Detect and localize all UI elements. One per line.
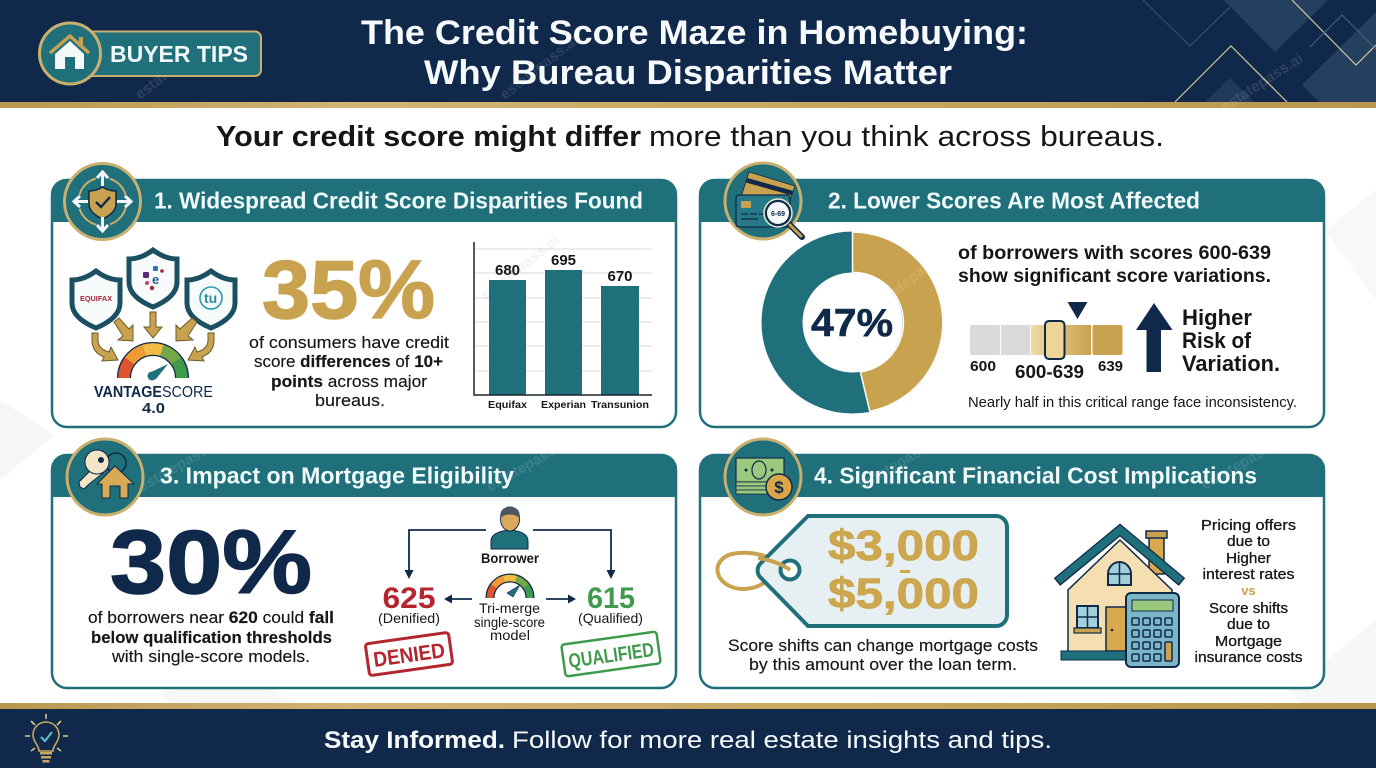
icon: money and coin	[725, 439, 801, 515]
price tag: $3,000 - $5,000: $3,000	[828, 522, 979, 570]
heading: panel 2: 2. Lower Scores Are Most Affected	[828, 188, 1200, 214]
flow diagram: borrower outcomes	[365, 507, 661, 677]
text: higher risk of variation	[1182, 305, 1280, 376]
text: pricing vs score shifts: Mortgage	[1215, 634, 1282, 650]
text: pricing vs score shifts: due to	[1227, 534, 1270, 550]
stamp: qualified	[561, 631, 661, 677]
panel 2: lower scores	[699, 163, 1325, 427]
heading: panel 1: 1. Widespread Credit Score Disparities Found	[154, 188, 643, 214]
panel 4: financial cost: estatepass.ai	[1198, 432, 1289, 493]
arrows into gauge	[92, 312, 214, 361]
icon: house with calculator	[1057, 530, 1182, 667]
label: vantagescore 4.0	[94, 384, 213, 417]
text: consumers description: bureaus.	[315, 392, 385, 410]
stat: 35%: 35%	[262, 243, 435, 336]
heading: panel 3: 3. Impact on Mortgage Eligibility	[160, 462, 514, 488]
text: consumers description: score differences of 10+	[254, 353, 443, 371]
panel 1: widespread disparities: estatepass.ai	[478, 232, 563, 303]
bar chart: scores by bureau: 695	[551, 252, 576, 269]
badge: buyer tips: BUYER TIPS	[110, 41, 248, 67]
tag string	[717, 553, 790, 589]
score: 615 qualified: (Qualified)	[578, 610, 643, 626]
range bar: 600-639: 600-639	[1015, 361, 1084, 382]
shield: experian	[129, 250, 177, 307]
note: nearly half: Nearly half in this critical range face inconsistency.	[968, 394, 1297, 411]
subtitle	[216, 121, 1164, 153]
score: 625 denied: 625	[382, 582, 436, 615]
arrow: to qualified score	[533, 530, 616, 579]
arrow: higher risk	[1136, 303, 1172, 372]
bar chart: scores by bureau: Equifax	[488, 399, 527, 411]
score: 615 qualified: 615	[587, 582, 635, 615]
label: tri-merge model	[474, 601, 545, 643]
shield: transunion: tu	[204, 290, 217, 306]
label: vantagescore 4.0: 4.0	[142, 400, 165, 417]
text: consumers description: points across major	[271, 373, 428, 391]
footer banner	[0, 703, 1376, 768]
heading: panel 4: 4. Significant Financial Cost Implications	[814, 462, 1257, 488]
label: tri-merge model: single-score	[474, 615, 545, 630]
range bar: 600-639	[970, 302, 1123, 382]
stat: 30%: 30%	[110, 513, 312, 613]
shield: equifax: EQUIFAX	[80, 294, 112, 303]
label: tri-merge model: model	[490, 628, 530, 643]
text: thresholds description	[88, 608, 334, 666]
arrow: left to 625	[444, 594, 472, 604]
text: thresholds description: of borrowers near 620 could fall	[88, 608, 334, 627]
gauge: vantagescore	[124, 349, 182, 378]
price tag: $3,000 - $5,000	[717, 516, 1007, 626]
shield: transunion	[187, 271, 235, 328]
subtitle: more than you think across bureaus.	[649, 121, 1164, 153]
icon: three bureau shields feeding VantageScore gauge	[72, 250, 235, 417]
text: pricing vs score shifts: Score shifts	[1209, 601, 1288, 617]
header banner: estatepass.ai	[1218, 50, 1306, 115]
range bar: 600-639: 600	[970, 358, 996, 375]
text: pricing vs score shifts	[1194, 518, 1302, 666]
text: higher risk of variation: Risk of	[1182, 328, 1251, 353]
bar chart: scores by bureau: 670	[607, 268, 633, 285]
arrow: right to 615	[546, 594, 576, 604]
text: borrowers description: of borrowers with scores 600-639	[958, 242, 1271, 264]
icon: key and house	[67, 439, 143, 515]
score: 625 denied	[378, 582, 440, 626]
text: pricing vs score shifts: insurance costs	[1194, 650, 1302, 666]
text: pricing vs score shifts: interest rates	[1202, 567, 1294, 583]
text: borrowers description	[958, 242, 1271, 287]
text: pricing vs score shifts: vs	[1241, 583, 1256, 598]
score: 615 qualified	[578, 582, 643, 626]
text: score shifts description: Score shifts can change mortgage costs	[728, 637, 1038, 655]
title: Why Bureau Disparities Matter	[424, 54, 952, 92]
bar chart: scores by bureau	[474, 242, 652, 411]
panel 3: mortgage eligibility	[51, 434, 677, 688]
text: consumers description	[249, 334, 449, 410]
text: borrowers description: show significant score variations.	[958, 265, 1271, 287]
bar chart: scores by bureau: Experian	[541, 399, 586, 411]
label: vantagescore 4.0: VANTAGESCORE	[94, 384, 213, 401]
icon: lightbulb with check	[25, 714, 68, 762]
text: score shifts description: by this amount over the loan term.	[749, 656, 1017, 674]
footer text: Stay Informed.	[324, 727, 505, 754]
title	[361, 14, 1028, 92]
arrow: to denied score	[404, 530, 486, 579]
icon: shield with arrows	[64, 164, 140, 240]
score: 625 denied: (Denified)	[378, 610, 440, 626]
panel 4: financial cost	[699, 432, 1325, 688]
panel 4: financial cost: estatepass.ai	[856, 432, 946, 493]
header banner	[0, 0, 1376, 115]
text: pricing vs score shifts: Higher	[1226, 551, 1271, 567]
header banner: estatepass.ai	[497, 32, 582, 103]
donut chart: 47%	[782, 232, 943, 411]
bar chart: scores by bureau: Transunion	[591, 399, 649, 411]
header banner: estatepass.ai	[132, 32, 217, 103]
stamp: qualified: QUALIFIED	[567, 639, 655, 673]
text: consumers description: of consumers have credit	[249, 334, 449, 352]
bar chart: scores by bureau: 680	[495, 262, 520, 279]
shield: experian: e	[152, 272, 159, 287]
icon: money and coin: $	[774, 478, 784, 497]
panel 1: widespread disparities	[51, 164, 677, 427]
stamp: denied: DENIED	[372, 639, 446, 672]
text: pricing vs score shifts: due to	[1227, 617, 1270, 633]
footer text: Follow for more real estate insights and tips.	[512, 727, 1052, 754]
label: tri-merge model: Tri-merge	[479, 601, 540, 616]
text: pricing vs score shifts: Pricing offers	[1201, 518, 1296, 534]
badge: buyer tips	[40, 23, 261, 84]
icon: credit cards and magnifier	[725, 163, 802, 239]
footer text	[324, 727, 1052, 754]
gauge: tri-merge	[490, 578, 530, 598]
subtitle: Your credit score might differ	[216, 121, 641, 153]
price tag: $3,000 - $5,000: $5,000	[828, 570, 979, 618]
text: higher risk of variation: Variation.	[1182, 351, 1280, 376]
text: score shifts description	[728, 637, 1038, 674]
panel 3: mortgage eligibility: estatepass.ai	[136, 434, 226, 495]
stat: 47%: 47%	[811, 302, 893, 345]
text: thresholds description: with single-score models.	[111, 647, 310, 666]
title: The Credit Score Maze in Homebuying:	[361, 14, 1028, 52]
shield: equifax	[72, 271, 120, 328]
icon: credit cards and magnifier: 6-69	[771, 211, 785, 218]
range bar: 600-639: 639	[1098, 358, 1123, 375]
text: thresholds description: below qualification thresholds	[91, 628, 332, 647]
icon: borrower	[491, 507, 528, 549]
text: higher risk of variation: Higher	[1182, 305, 1252, 330]
panel 2: lower scores: estatepass.ai	[870, 242, 955, 313]
calculator	[1126, 593, 1179, 667]
panel 3: mortgage eligibility: estatepass.ai	[484, 434, 574, 495]
flow diagram: borrower outcomes: Borrower	[481, 550, 540, 566]
